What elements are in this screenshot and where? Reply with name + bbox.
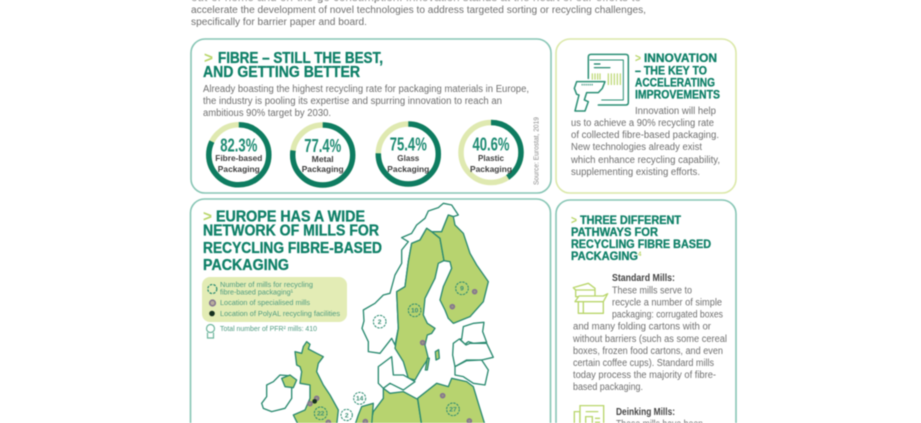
donut: glass packaging 75.4%: 75.4% [390,134,427,154]
estonia [460,322,487,344]
deinking mills text: Deinking Mills: [616,407,675,418]
germany [370,388,422,423]
netherlands sea count 14 [354,392,366,404]
heading: 4 [638,252,642,258]
norway mills count: 2 [378,319,382,326]
map of europe [262,203,493,423]
donut: fibre-based packaging 82.3%: Packaging [218,164,260,174]
icon: newspaper [574,406,604,423]
belgium count 2 [341,409,352,421]
body text: ambitious 90% target by 2030. [203,108,331,119]
heading: RECYCLING FIBRE-BASED [203,240,382,257]
great britain [293,342,338,423]
legend icon: specialised mills [210,300,215,306]
body text: supplementing existing efforts. [571,167,700,178]
body text: Innovation will help [635,106,716,117]
panel border [556,39,736,193]
panel: three pathways [556,200,736,423]
legend label: specialised mills: Location of specialised mills [220,300,311,307]
body text: us to achieve a 90% recycling rate [571,118,714,129]
heading: > [204,50,213,67]
total mills: Total number of PFR² mills: 410 [220,326,317,333]
body text: of collected fibre-based packaging. [571,130,719,141]
donut: plastic packaging 40.6%: Packaging [470,164,512,174]
donut: metal packaging 77.4% [293,125,353,185]
standard mills text: packaging: corrugated boxes [612,310,723,321]
belgium count 2: 2 [345,412,349,419]
norway mills count [373,315,386,328]
sweden mills count: 10 [411,308,419,315]
standard mills text: and many folding cartons with or [573,322,712,333]
donut: fibre-based packaging 82.3% [209,125,269,185]
ireland [262,375,292,412]
poland mills count [447,403,459,416]
legend label: number of mills: Number of mills for recycling [220,282,313,289]
legend icon: PolyAL facilities [209,311,215,316]
icon: boxes [573,283,608,313]
sweden [395,228,444,380]
donut: fibre-based packaging 82.3%: 82.3% [220,136,257,156]
oland [425,358,429,370]
heading: PACKAGING [571,249,638,263]
donut: metal packaging 77.4%: 77.4% [304,136,341,156]
donut: plastic packaging 40.6% [461,122,521,182]
donut: plastic packaging 40.6%: 40.6% [472,134,510,154]
standard mills text: today process the majority of fibre- [573,370,716,381]
panel: innovation [556,39,736,193]
gotland [435,350,439,360]
uk mills count: 22 [317,411,325,418]
intro text: accelerate the development of novel technologies to address targeted sorting or recycling challenges, [191,5,646,16]
body text [570,106,720,178]
intro text: specifically for barrier paper and board. [191,17,367,28]
heading: PATHWAYS FOR [571,225,658,239]
specialised mill markers [363,290,477,423]
heading: – THE KEY TO [635,64,707,78]
netherlands [355,403,373,423]
heading: > [571,213,577,227]
donut: metal packaging 77.4%: Metal [312,154,334,164]
icon: rosette [206,324,214,338]
legend label: PolyAL facilities: Location of PolyAL recycling facilities [220,311,341,318]
donut: glass packaging 75.4% [378,124,438,184]
intro text [191,0,646,28]
source note: Source: Eurostat, 2019 [534,117,540,185]
panel: fibre still the best [191,39,551,193]
heading [571,213,711,263]
uk specialised markers [308,396,330,423]
icon: barcode scanner and screen [574,54,628,111]
body text: the industry is pooling its expertise and spurring innovation to reach an [203,96,502,107]
body text: New technologies already exist [571,142,702,153]
heading [635,51,720,102]
standard mills text: without barriers (such as some cereal [572,334,727,345]
poland [418,378,485,423]
standard mills text: certain coffee cups). Standard mills [573,358,714,369]
map: northern europe [341,203,493,423]
donut: glass packaging 75.4%: Packaging [387,164,429,174]
donut: plastic packaging 40.6%: Plastic [478,153,504,163]
body text [203,84,529,119]
heading: PACKAGING [203,257,289,274]
latvia [453,339,493,367]
heading: AND GETTING BETTER [203,64,360,81]
body text: Already boasting the highest recycling rate for packaging materials in Europe, [203,84,529,95]
heading: INNOVATION [644,51,717,65]
heading: FIBRE – STILL THE BEST, [218,50,383,67]
heading: THREE DIFFERENT [580,213,682,227]
finland mills count: 9 [460,286,464,293]
standard mills text: recycle a number of simple [612,298,722,309]
legend icon: number of mills [208,284,217,294]
donut: metal packaging 77.4%: Packaging [302,164,344,174]
legend label: number of mills: fibre-based packaging¹ [220,290,294,296]
panel border [191,39,551,193]
finland mills count [456,282,468,295]
panel: europe map [190,199,550,423]
finland [432,215,488,323]
denmark [378,357,415,390]
body text: which enhance recycling capability, [570,155,720,166]
donut: fibre-based packaging 82.3%: Fibre-based [215,153,262,163]
heading: > [635,51,641,65]
standard mills text [572,273,727,393]
northern ireland [282,375,297,388]
heading: RECYCLING FIBRE BASED [571,237,711,251]
uk PolyAL marker [312,399,317,404]
standard mills text: boxes, frozen food cartons, and even [573,346,723,357]
heading [203,209,382,274]
sweden mills count [408,304,421,317]
heading [203,50,383,81]
lithuania [455,360,488,385]
heading: EUROPE HAS A WIDE [216,209,365,226]
legend background [202,277,347,322]
norway [362,203,458,353]
legend [202,277,347,322]
poland mills count: 27 [449,407,457,414]
map: british isles [262,342,338,423]
panel border [190,199,550,423]
deinking mills text [616,407,703,423]
legend label: number of mills [220,282,313,296]
panel border [556,200,736,423]
standard mills text: These mills serve to [612,286,692,297]
heading: NETWORK OF MILLS FOR [203,223,379,240]
standard mills text: based packaging. [573,382,643,393]
standard mills text: Standard Mills: [612,273,675,284]
heading: ACCELERATING [635,76,715,90]
heading: > [203,209,212,226]
donut: glass packaging 75.4%: Glass [397,153,420,163]
heading: IMPROVEMENTS [635,88,720,102]
netherlands sea count 14: 14 [356,396,364,403]
